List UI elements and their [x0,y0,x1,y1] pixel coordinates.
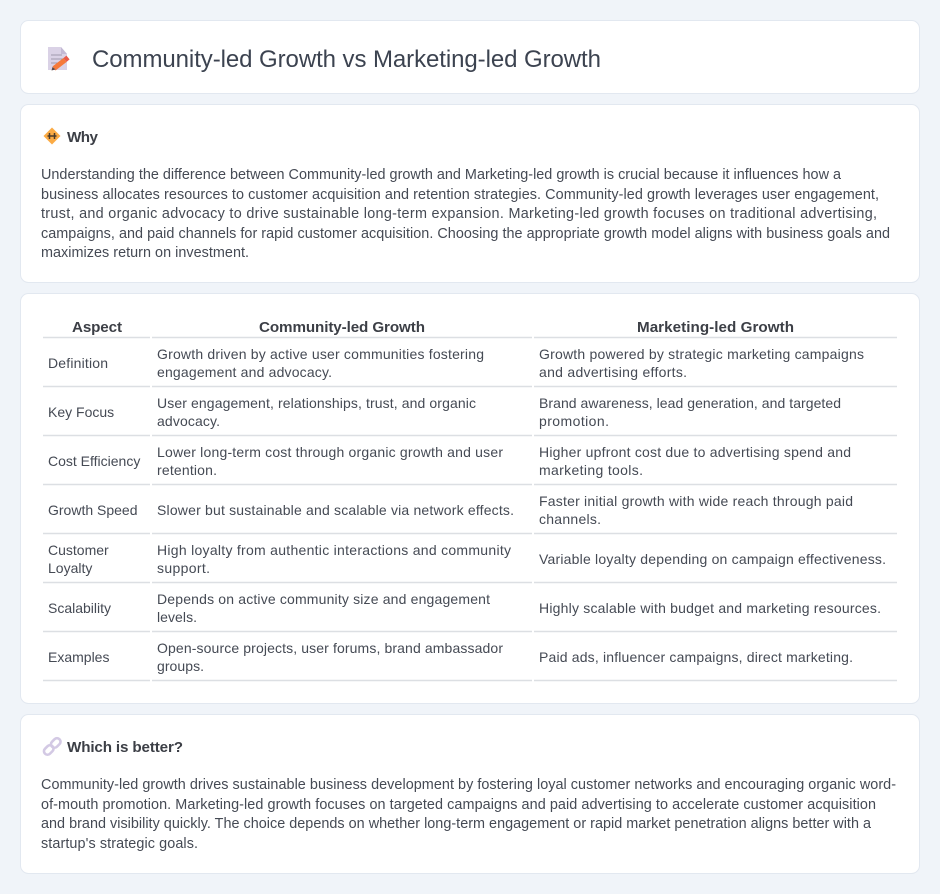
text block: why: campaigns, and paid channels for rapid customer acquisition. Choosing the appropriate growth model aligns with business goals and [41,226,890,242]
text block: which is better: startup's strategic goals. [41,836,198,852]
row: scalability: Scalability [48,600,111,616]
text block: which is better: Community-led growth drives sustainable business development by fostering loyal customer networks and encouraging organic word- [41,777,896,793]
text block: which is better: of-mouth promotion. Marketing-led growth focuses on targeted campaigns and paid advertising to accelerate customer acquisition [41,797,876,813]
text block: why: maximizes return on investment. [41,245,249,261]
row: key focus: Key Focus [48,404,114,420]
row: examples: Open-source projects, user forums, brand ambassador [157,640,503,656]
row: customer loyalty: High loyalty from authentic interactions and community [157,542,511,558]
row: scalability: Depends on active community size and engagement [157,591,490,607]
table header: Community-led Growth [259,319,425,336]
panel: header [20,20,920,94]
row: key focus: advocacy. [157,413,220,429]
row: scalability [43,591,897,632]
row: growth speed: Slower but sustainable and scalable via network effects. [157,502,514,518]
icon: link [43,737,62,756]
row: definition: Growth driven by active user communities fostering [157,346,484,362]
table header: Marketing-led Growth [637,319,794,336]
row: scalability: levels. [157,609,197,625]
row: key focus [43,395,897,436]
row: definition: and advertising efforts. [539,364,687,380]
row: definition: Growth powered by strategic marketing campaigns [539,346,864,362]
panel: which is better [20,714,920,874]
row: cost efficiency: retention. [157,462,217,478]
text block: why [41,167,890,261]
row: cost efficiency [43,444,897,484]
text block: which is better [41,777,896,852]
icon: memo with pencil [48,47,68,70]
text block: which is better: and brand visibility quickly. The choice depends on whether long-term engagement or rapid market penetration aligns better with a [41,816,871,832]
title: Community-led Growth vs Marketing-led Growth [92,46,601,73]
row: growth speed [43,493,897,534]
row: key focus: promotion. [539,413,609,429]
text block: why: business allocates resources to customer acquisition and retention strategies. Community-led growth leverages user engagement, [41,187,879,203]
text block: why: trust, and organic advocacy to drive sustainable long-term expansion. Marketing-led growth focuses on traditional advertising, [41,206,877,222]
row: cost efficiency: Lower long-term cost through organic growth and user [157,444,503,460]
icon: warning diamond [44,128,60,144]
heading: which is better: Which is better? [67,739,183,756]
table header [43,319,897,338]
row: cost efficiency: Cost Efficiency [48,453,140,469]
row: growth speed: Growth Speed [48,502,138,518]
heading: why: Why [67,129,99,146]
row: cost efficiency: marketing tools. [539,462,643,478]
row: growth speed: Faster initial growth with wide reach through paid [539,493,853,509]
row: customer loyalty: Customer [48,542,109,558]
panel: comparison table [20,294,920,704]
row: definition: engagement and advocacy. [157,364,332,380]
row: scalability: Highly scalable with budget and marketing resources. [539,600,881,616]
row: customer loyalty: Variable loyalty depending on campaign effectiveness. [539,551,886,567]
row: customer loyalty: support. [157,560,210,576]
row: examples: groups. [157,658,204,674]
row: key focus: Brand awareness, lead generation, and targeted [539,395,841,411]
panel: why [20,104,920,282]
row: cost efficiency: Higher upfront cost due to advertising spend and [539,444,851,460]
table header: Aspect [72,319,122,336]
row: key focus: User engagement, relationships, trust, and organic [157,395,476,411]
row: definition [43,346,897,386]
row: customer loyalty [43,542,897,582]
row: growth speed: channels. [539,511,601,527]
text block: why: Understanding the difference between Community-led growth and Marketing-led growth is crucial because it influences how a [41,167,841,183]
row: customer loyalty: Loyalty [48,560,92,576]
row: examples: Paid ads, influencer campaigns, direct marketing. [539,649,853,665]
row: definition: Definition [48,355,108,371]
row: examples: Examples [48,649,109,665]
row: examples [43,640,897,680]
